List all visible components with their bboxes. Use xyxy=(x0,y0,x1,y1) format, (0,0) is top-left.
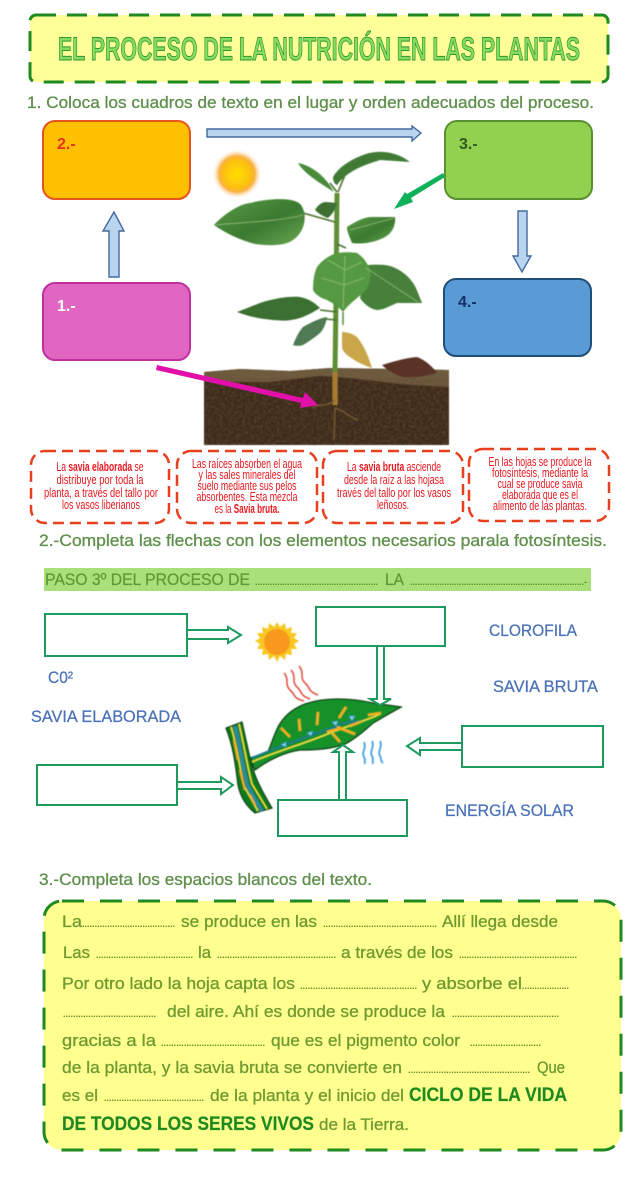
sun xyxy=(212,149,262,199)
line 5: que es el pigmento color xyxy=(271,1032,461,1050)
card: fotosíntesis: alimento de las plantas. xyxy=(493,499,587,513)
icon: heat waves xyxy=(284,666,318,701)
line 6: ................................................ xyxy=(408,1065,530,1075)
line 6: Que xyxy=(537,1059,565,1077)
card: savia bruta: La savia bruta asciende xyxy=(347,460,441,474)
card: raíces: Las raíces absorben el agua xyxy=(192,457,302,471)
line 1: se produce en las xyxy=(181,913,317,931)
card: savia bruta: desde la raíz a las hojasa xyxy=(344,473,444,487)
box 1: 1.- xyxy=(57,298,76,315)
box 3 xyxy=(445,121,592,199)
line 7: ........................................ xyxy=(104,1093,204,1103)
line 4 xyxy=(63,1003,559,1021)
label: energía solar: ENERGÍA SOLAR xyxy=(445,801,574,820)
line 1: La xyxy=(62,913,83,931)
banner: paso 3: LA xyxy=(385,571,404,589)
leaf diagram xyxy=(226,622,401,813)
card: fotosíntesis xyxy=(469,449,609,521)
card: savia bruta: leñosos. xyxy=(377,498,409,512)
heading: section 1: 1. Coloca los cuadros de texto en el lugar y orden adecuados del proceso. xyxy=(27,94,594,112)
banner: paso 3 xyxy=(44,568,591,591)
line 2: ............................................... xyxy=(459,950,577,960)
icon: sun xyxy=(255,622,299,662)
line 2: ....................................... xyxy=(96,950,193,960)
line 1: ............................................. xyxy=(323,919,437,929)
input box: top with arrow xyxy=(316,607,445,705)
leaf veins xyxy=(216,215,418,308)
box 2: 2.- xyxy=(57,136,76,153)
icon: water vapour waves xyxy=(363,741,383,764)
line 2: a través de los xyxy=(341,944,453,962)
card: fotosíntesis: cual se produce savia xyxy=(498,477,583,491)
arrow: box 2 to box 3 xyxy=(207,126,421,141)
stem and petioles xyxy=(335,193,337,372)
line 2 xyxy=(63,944,577,962)
arrow: box 3 to box 4 xyxy=(513,211,531,272)
box 4: 4.- xyxy=(458,294,477,311)
plant illustration xyxy=(204,149,449,445)
panel: fill-in text xyxy=(44,901,621,1150)
card: raíces: es la Savia bruta. xyxy=(214,502,280,516)
card: savia bruta xyxy=(323,451,463,523)
box 4 xyxy=(444,279,591,356)
input box: bottom with arrow xyxy=(278,745,407,836)
line 5: ......................................... xyxy=(161,1038,265,1048)
banner: paso 3: .................................................. xyxy=(255,577,378,587)
icon: leaf xyxy=(250,699,401,770)
card: savia elaborada: planta, a través del tallo por xyxy=(44,486,158,500)
box 1 xyxy=(43,283,190,360)
title banner xyxy=(30,15,608,82)
card: savia bruta: través del tallo por los vasos xyxy=(337,486,451,500)
line 6: de la planta, y la savia bruta se convierte en xyxy=(62,1059,402,1077)
heading: section 3: 3.-Completa los espacios blancos del texto. xyxy=(39,871,372,889)
card: raíces: absorbentes. Esta mezcla xyxy=(196,490,298,504)
card: savia elaborada: los vasos liberianos xyxy=(62,498,140,512)
line 3 xyxy=(62,975,569,993)
line 5: gracias a la xyxy=(62,1032,157,1050)
input box: right with arrow xyxy=(407,726,603,767)
arrow: box 1 to box 2 xyxy=(103,212,124,277)
card: raíces: y las sales minerales del xyxy=(198,468,296,482)
line 2: Las xyxy=(63,944,90,962)
heading: section 2: 2.-Completa las flechas con los elementos necesarios parala fotosíntesis. xyxy=(39,532,607,550)
line 7: CICLO DE LA VIDA xyxy=(409,1085,567,1106)
card: fotosíntesis: fotosíntesis, mediante la xyxy=(492,466,588,480)
line 8: de la Tierra. xyxy=(319,1116,409,1134)
card: savia elaborada xyxy=(31,451,169,523)
line 5: ............................ xyxy=(470,1038,541,1048)
line 2: ............................................... xyxy=(217,950,336,960)
label: savia bruta: SAVIA BRUTA xyxy=(493,678,598,696)
input box: left bottom with arrow xyxy=(37,765,233,805)
line 3: Por otro lado la hoja capta los xyxy=(62,975,295,993)
label: clorofila: CLOROFILA xyxy=(489,622,577,640)
line 8: DE TODOS LOS SERES VIVOS xyxy=(62,1114,314,1135)
line 4: .......................................... xyxy=(452,1009,559,1019)
line 6 xyxy=(62,1059,565,1077)
box 3: 3.- xyxy=(459,136,478,153)
line 7: es el xyxy=(62,1087,98,1105)
input box: left top with arrow xyxy=(45,614,241,656)
line 1: ..................................... xyxy=(82,919,175,929)
card: savia elaborada: distribuye por toda la xyxy=(56,473,144,487)
line 3: .............................................. xyxy=(300,981,417,991)
icon: stem cross-section xyxy=(226,722,272,813)
line 1: Allí llega desde xyxy=(442,913,558,931)
line 4: ..................................... xyxy=(63,1009,156,1019)
banner: paso 3: .......................................................................- xyxy=(410,577,587,587)
card: raíces xyxy=(177,451,317,523)
line 1 xyxy=(62,913,558,931)
line 5 xyxy=(62,1032,541,1050)
line 2: la xyxy=(198,944,212,962)
line 3: ................... xyxy=(522,981,569,991)
line 3: y absorbe el xyxy=(422,975,522,993)
leaves xyxy=(214,199,305,245)
card: raíces: suelo mediante sus pelos xyxy=(198,479,296,493)
line 7: de la planta y el inicio del xyxy=(210,1087,404,1105)
line 7 xyxy=(62,1085,567,1106)
card: fotosíntesis: En las hojas se produce la xyxy=(488,455,592,469)
label: savia elaborada: SAVIA ELABORADA xyxy=(31,708,181,726)
arrow: magenta, box 1 to roots xyxy=(156,365,318,408)
label: CO2: C0² xyxy=(48,669,73,687)
banner: paso 3: PASO 3º DEL PROCESO DE xyxy=(45,571,250,589)
card: savia elaborada: La savia elaborada se xyxy=(56,460,144,474)
soil xyxy=(204,368,449,445)
box 2 xyxy=(43,121,190,199)
card: fotosíntesis: elaborada que es el xyxy=(502,488,578,502)
arrow: green, box 3 to leaves xyxy=(394,173,445,209)
line 4: del aire. Ahí es donde se produce la xyxy=(167,1003,446,1021)
